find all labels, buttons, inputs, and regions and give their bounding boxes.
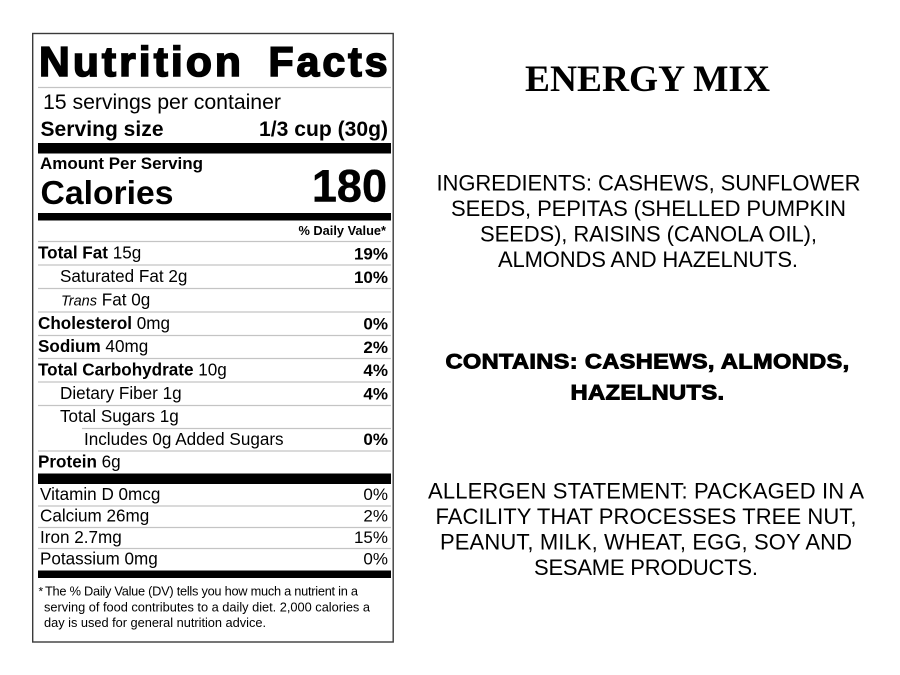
row: iron: 15% — [354, 528, 388, 547]
thick divider under calories — [38, 213, 391, 220]
vitamins and minerals table — [38, 485, 391, 568]
calories: Calories — [40, 174, 174, 212]
row: dietary fiber: Dietary Fiber 1g — [60, 384, 182, 403]
text block: allergen statement — [428, 478, 864, 580]
row: saturated fat: 10% — [354, 268, 388, 287]
thick divider under serving size — [38, 143, 391, 154]
row: cholesterol — [38, 314, 388, 334]
row: iron — [40, 528, 388, 547]
row: saturated fat — [60, 267, 388, 287]
row: added sugars — [84, 430, 388, 449]
serving size — [40, 118, 388, 141]
row: potassium — [40, 550, 388, 568]
heading: Nutrition Facts: Facts — [268, 38, 390, 85]
text block: ingredients: INGREDIENTS: CASHEWS, SUNFLOWER — [436, 170, 860, 196]
text block: allergen statement: FACILITY THAT PROCESSES TREE NUT, — [436, 504, 856, 529]
panel: nutrition facts label — [33, 34, 393, 642]
row: total fat: Total Fat 15g — [38, 244, 141, 262]
row: sodium — [38, 337, 388, 357]
thick divider above footnote — [38, 570, 391, 578]
row: dietary fiber: 4% — [363, 384, 388, 404]
row: potassium: Potassium 0mg — [40, 550, 158, 568]
row: potassium: 0% — [363, 550, 388, 568]
text block: ingredients — [436, 170, 860, 272]
row: trans fat: Trans Fat 0g — [61, 290, 150, 310]
text block: allergen statement: PEANUT, MILK, WHEAT, EGG, SOY AND — [440, 530, 852, 554]
row: protein: Protein 6g — [38, 452, 121, 472]
nutrient table — [38, 242, 391, 472]
row: sodium: 2% — [363, 338, 388, 357]
row: cholesterol: 0% — [363, 314, 388, 334]
text block: ingredients: ALMONDS AND HAZELNUTS. — [498, 247, 798, 272]
row: dietary fiber — [60, 384, 388, 404]
footnote: The % Daily Value (DV) tells you how much a nutrient in a — [45, 584, 359, 598]
row: added sugars: Includes 0g Added Sugars — [84, 430, 284, 449]
row: total fat — [38, 244, 388, 264]
text block: contains statement: HAZELNUTS. — [570, 382, 724, 404]
footnote: * — [38, 584, 44, 598]
title: Energy Mix: ENERGY MIX — [525, 59, 770, 100]
serving size: 1/3 cup (30g) — [259, 118, 388, 141]
text block: contains statement: CONTAINS: CASHEWS, ALMONDS, — [446, 350, 850, 374]
serving size: Serving size — [40, 118, 164, 141]
heading: Nutrition Facts — [39, 38, 390, 85]
row: cholesterol: Cholesterol 0mg — [38, 314, 170, 333]
row: added sugars: 0% — [363, 430, 388, 449]
footnote: serving of food contributes to a daily diet. 2,000 calories a — [44, 600, 371, 614]
calories: 180 — [312, 160, 387, 212]
row: vitamin D — [40, 485, 388, 504]
row: calcium: Calcium 26mg — [40, 506, 149, 526]
footnote: day is used for general nutrition advice. — [44, 615, 266, 630]
text block: contains statement — [446, 350, 850, 404]
row: total carbohydrate: Total Carbohydrate 10g — [38, 360, 227, 380]
text block: ingredients: SEEDS), RAISINS (CANOLA OIL), — [480, 222, 817, 246]
row: sodium: Sodium 40mg — [38, 337, 148, 356]
row: vitamin D: 0% — [363, 485, 388, 504]
row: iron: Iron 2.7mg — [40, 528, 122, 547]
thick divider under protein — [38, 474, 391, 484]
row: total carbohydrate: 4% — [363, 361, 388, 380]
amount per serving: Amount Per Serving — [40, 154, 203, 173]
row: total sugars: Total Sugars 1g — [60, 407, 179, 426]
servings per container: 15 servings per container — [43, 90, 281, 114]
row: calcium — [40, 506, 388, 526]
heading: Nutrition Facts: Nutrition — [39, 38, 244, 85]
row: total fat: 19% — [354, 244, 388, 264]
text block: allergen statement: ALLERGEN STATEMENT: PACKAGED IN A — [428, 478, 864, 504]
row: calcium: 2% — [363, 506, 388, 526]
percent daily value header: % Daily Value* — [298, 223, 386, 238]
row: saturated fat: Saturated Fat 2g — [60, 267, 187, 286]
text block: allergen statement: SESAME PRODUCTS. — [534, 555, 758, 580]
text block: ingredients: SEEDS, PEPITAS (SHELLED PUMPKIN — [451, 196, 846, 221]
calories — [40, 160, 387, 212]
footnote — [38, 584, 371, 630]
row: total carbohydrate — [38, 360, 388, 380]
row: vitamin D: Vitamin D 0mcg — [40, 485, 160, 504]
